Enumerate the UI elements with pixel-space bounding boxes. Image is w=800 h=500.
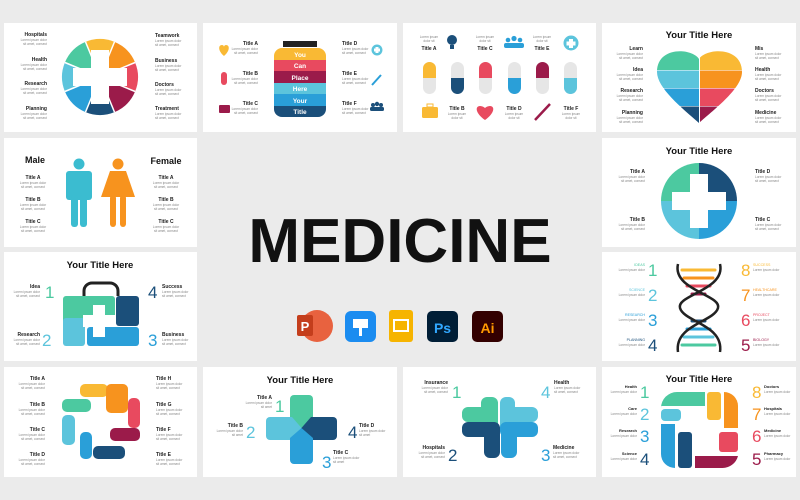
labels: Lorem ipsum dolor (359, 429, 386, 433)
panel: wheel diagram (4, 23, 197, 132)
labels: Insurance (424, 380, 448, 386)
labels: Lorem ipsum dolor (617, 116, 644, 120)
labels: Title D (30, 452, 45, 458)
labels: Doctors (755, 88, 774, 94)
labels: Lorem ipsum dolor (764, 457, 791, 461)
numbers: Lorem ipsum dolor (619, 343, 646, 347)
labels: sit amet, consect (424, 390, 448, 394)
heading: Your Title Here (666, 146, 732, 157)
labels: sit amet, consect (162, 342, 186, 346)
jar: You (294, 52, 306, 59)
labels: sit amet, consect (342, 111, 366, 115)
labels: Title B (30, 402, 45, 408)
bottom row: Title B (449, 106, 465, 112)
jar: Here (293, 86, 308, 93)
labels: sit amet, consect (234, 81, 258, 85)
labels right: sit amet, consect (155, 116, 179, 120)
jar: Title (293, 109, 307, 116)
labels: Title A (243, 41, 258, 47)
labels left: sit amet, consect (23, 67, 47, 71)
icon: powerpoint: P (301, 319, 310, 334)
labels: sit amet, consect (619, 56, 643, 60)
labels: Lorem ipsum dolor (14, 290, 41, 294)
labels: Lorem ipsum dolor (611, 457, 638, 461)
labels: Lorem ipsum dolor (764, 434, 791, 438)
labels: Lorem ipsum dolor (619, 175, 646, 179)
labels: sit amet, consect (156, 437, 180, 441)
petal chart (266, 395, 337, 464)
labels left: Research (24, 81, 47, 87)
numbers: 2 (648, 286, 657, 305)
labels: 6 (752, 427, 761, 446)
labels: sit amet, consect (621, 227, 645, 231)
labels: Title B (158, 197, 174, 203)
labels: Lorem ipsum dolor (764, 412, 791, 416)
numbers: SUCCESS (753, 263, 771, 267)
labels: Title G (156, 402, 172, 408)
numbers: 5 (741, 336, 750, 355)
labels: Title C (25, 219, 41, 225)
labels: sit amet, consect (21, 185, 45, 189)
labels: sit amet, consect (21, 412, 45, 416)
labels: Idea (30, 284, 40, 290)
labels: sit amet, consect (16, 294, 40, 298)
female figure (101, 158, 135, 227)
labels: sit amet, consect (154, 229, 178, 233)
labels (619, 169, 782, 231)
numbers: Lorem ipsum dolor (753, 293, 780, 297)
labels: sit amet, consect (554, 390, 578, 394)
labels (617, 46, 782, 124)
top row: Lorem ipsum (476, 35, 495, 39)
labels: sit amet, consect (21, 229, 45, 233)
labels: Lorem ipsum dolor (156, 382, 183, 386)
bottom row: dolor sit (565, 116, 577, 120)
numbers: Lorem ipsum dolor (619, 293, 646, 297)
labels left: Lorem ipsum dolor (21, 87, 48, 91)
labels left: Hospitals (24, 32, 47, 38)
labels: Success (162, 284, 183, 290)
icon: illustrator (472, 311, 503, 342)
labels: sit amet, consect (619, 120, 643, 124)
labels: Lorem ipsum dolor (162, 338, 189, 342)
labels: 5 (752, 450, 761, 469)
numbers: 8 (741, 261, 750, 280)
bottom row: Title D (506, 106, 522, 112)
labels (19, 376, 183, 466)
labels: sit amet, consect (755, 56, 779, 60)
labels: Lorem ipsum dolor (156, 458, 183, 462)
panel: woven cross (403, 367, 596, 477)
labels: Hospitals (764, 406, 783, 411)
labels: 1 (452, 383, 461, 402)
panel: male female (4, 138, 197, 247)
labels: Lorem ipsum dolor (764, 390, 791, 394)
ring chart (62, 384, 140, 459)
labels: Lorem ipsum dolor (14, 338, 41, 342)
labels: sit amet, consect (21, 386, 45, 390)
labels: Learn (629, 46, 643, 52)
labels: sit amet (333, 460, 344, 464)
heading: Your Title Here (267, 375, 333, 386)
bottom row: Lorem ipsum (448, 112, 467, 116)
labels: Care (628, 406, 638, 411)
labels: Business (162, 332, 184, 338)
labels: Lorem ipsum dolor (342, 77, 369, 81)
labels: Lorem ipsum dolor (553, 451, 580, 455)
labels: Lorem ipsum dolor (342, 107, 369, 111)
labels: Title E (342, 71, 358, 77)
panel: petal cross (203, 367, 397, 477)
labels: sit amet, consect (553, 455, 577, 459)
title: MEDICINE (248, 207, 552, 276)
icon: photoshop: Ps (434, 320, 451, 336)
jar: Your (293, 98, 308, 105)
panel: pills (403, 23, 596, 132)
labels: Lorem ipsum dolor (619, 223, 646, 227)
labels right: Lorem ipsum dolor (155, 64, 182, 68)
numbers (619, 261, 780, 355)
top row: dolor sit (423, 39, 435, 43)
numbers: 1 (648, 261, 657, 280)
labels: Lorem ipsum dolor (419, 451, 446, 455)
labels: Lorem ipsum dolor (611, 412, 638, 416)
labels: sit amet, consect (156, 412, 180, 416)
labels: 3 (541, 446, 550, 465)
labels: Lorem ipsum dolor (755, 116, 782, 120)
panel: jar (203, 23, 397, 132)
labels: sit amet, consect (755, 77, 779, 81)
labels: Title D (359, 423, 375, 429)
numbers: Lorem ipsum dolor (753, 268, 780, 272)
labels right: Treatment (155, 106, 179, 112)
labels: Lorem ipsum dolor (342, 47, 369, 51)
icon: slides (389, 310, 413, 342)
icon: illustrator: Ai (480, 320, 494, 336)
labels right (155, 33, 182, 120)
heading: Your Title Here (666, 374, 732, 385)
numbers: 4 (648, 336, 657, 355)
bottom row (422, 104, 581, 120)
jar: Can (294, 63, 306, 70)
labels: Lorem ipsum dolor (617, 52, 644, 56)
labels: Health (554, 380, 569, 386)
labels: Title F (156, 427, 171, 433)
bottom row: dolor sit (451, 116, 463, 120)
numbers: HEALTHCARE (753, 288, 777, 292)
labels: Medicine (755, 110, 777, 116)
male figure (66, 158, 92, 227)
labels: sit amet, consect (621, 179, 645, 183)
labels: Lorem ipsum dolor (755, 52, 782, 56)
labels right: sit amet, consect (155, 43, 179, 47)
labels: 7 (752, 405, 761, 424)
labels: Lorem ipsum dolor (422, 386, 449, 390)
labels left: Lorem ipsum dolor (21, 112, 48, 116)
briefcase chart (63, 283, 139, 346)
labels: Lorem ipsum dolor (611, 390, 638, 394)
bottom row: Lorem ipsum (562, 112, 581, 116)
labels left: Health (32, 57, 47, 63)
labels: Title A (30, 376, 45, 382)
labels: 8 (752, 383, 761, 402)
labels: Lorem ipsum dolor (611, 434, 638, 438)
labels (611, 383, 791, 469)
labels: Title D (342, 41, 358, 47)
labels: Title E (156, 452, 172, 458)
labels: Lorem ipsum dolor (217, 429, 244, 433)
icon: powerpoint (297, 310, 333, 342)
labels right: Lorem ipsum dolor (155, 112, 182, 116)
pills (423, 62, 577, 94)
labels: Lorem ipsum dolor (19, 458, 46, 462)
labels: sit amet, consect (421, 455, 445, 459)
labels: Lorem ipsum dolor (20, 203, 47, 207)
labels: sit amet, consect (21, 207, 45, 211)
labels: Lorem ipsum dolor (755, 175, 782, 179)
labels: 4 (148, 283, 157, 302)
labels: Lorem ipsum dolor (20, 181, 47, 185)
labels: sit amet, consect (342, 51, 366, 55)
icon: keynote (345, 311, 376, 342)
labels: Title A (158, 175, 174, 181)
icons: software logos (297, 310, 503, 342)
labels: 4 (640, 450, 649, 469)
labels: Medicine (764, 428, 782, 433)
labels: sit amet, consect (156, 462, 180, 466)
labels: Health (625, 384, 638, 389)
labels: Lorem ipsum dolor (755, 94, 782, 98)
labels: Lorem ipsum dolor (153, 225, 180, 229)
labels: Title A (257, 395, 272, 401)
top row: Title E (535, 46, 550, 52)
panel: segmented cross ring (4, 367, 197, 477)
labels: sit amet, consect (342, 81, 366, 85)
labels right: Teamwork (155, 33, 180, 39)
numbers: Lorem ipsum dolor (753, 318, 780, 322)
dna helix (677, 264, 721, 352)
labels: Mis (755, 46, 764, 52)
bottom row: Lorem ipsum (505, 112, 524, 116)
labels: 3 (322, 453, 331, 472)
labels right: Lorem ipsum dolor (155, 39, 182, 43)
labels left (21, 32, 48, 120)
labels: Title B (630, 217, 645, 223)
labels right: sit amet, consect (155, 68, 179, 72)
labels: Lorem ipsum dolor (19, 382, 46, 386)
labels: Hospitals (422, 445, 445, 451)
labels right: sit amet, consect (155, 92, 179, 96)
headings (25, 155, 182, 166)
labels: Lorem ipsum dolor (156, 408, 183, 412)
labels: Lorem ipsum dolor (554, 386, 581, 390)
labels: Lorem ipsum dolor (153, 181, 180, 185)
panel: rounded square ring (602, 367, 796, 477)
labels: Research (619, 428, 638, 433)
labels: Title C (333, 450, 349, 456)
labels: sit amet, consect (21, 462, 45, 466)
labels: sit amet, consect (755, 179, 779, 183)
circle cross chart (661, 163, 737, 239)
labels: Lorem ipsum dolor (755, 73, 782, 77)
labels: Title B (228, 423, 243, 429)
numbers: 3 (648, 311, 657, 330)
heading: Your Title Here (67, 260, 133, 271)
panel: heart (602, 23, 796, 132)
wheel segments (62, 39, 138, 115)
labels: Title A (630, 169, 645, 175)
labels: sit amet, consect (755, 227, 779, 231)
numbers: 6 (741, 311, 750, 330)
numbers: RESEARCH (625, 313, 645, 317)
top row: Title C (477, 46, 493, 52)
numbers: PROJECT (753, 313, 771, 317)
numbers: BIOLOGY (753, 338, 770, 342)
bottom row: Title F (564, 106, 578, 112)
bottom row: dolor sit (508, 116, 520, 120)
labels right: Lorem ipsum dolor (155, 88, 182, 92)
headings: Female (150, 156, 182, 166)
labels: sit amet (359, 433, 370, 437)
labels: Lorem ipsum dolor (232, 107, 259, 111)
labels: 2 (448, 446, 457, 465)
labels: Lorem ipsum dolor (153, 203, 180, 207)
labels: 1 (640, 383, 649, 402)
labels (419, 380, 581, 465)
top row: Lorem ipsum (533, 35, 552, 39)
labels left: Planning (26, 106, 47, 112)
labels: Lorem ipsum dolor (156, 433, 183, 437)
icon: photoshop (427, 311, 458, 342)
woven cross chart (462, 397, 538, 458)
labels: 4 (541, 383, 550, 402)
numbers: SCIENCE (629, 288, 646, 292)
labels: sit amet, consect (755, 98, 779, 102)
labels left: Lorem ipsum dolor (21, 63, 48, 67)
labels: Lorem ipsum dolor (333, 456, 360, 460)
labels: sit amet (261, 405, 272, 409)
panel: briefcase (4, 252, 197, 361)
labels: Title D (755, 169, 771, 175)
labels: Doctors (764, 384, 780, 389)
labels: Lorem ipsum dolor (617, 94, 644, 98)
labels: Title C (30, 427, 45, 433)
labels left: Lorem ipsum dolor (21, 38, 48, 42)
panel: dna (602, 252, 796, 361)
labels: 1 (275, 397, 284, 416)
labels: 3 (148, 331, 157, 350)
top row: Title A (421, 46, 437, 52)
labels (232, 41, 369, 115)
labels: sit amet, consect (154, 185, 178, 189)
heart chart (657, 51, 742, 123)
labels: sit amet, consect (21, 437, 45, 441)
labels: sit amet, consect (234, 111, 258, 115)
labels: Lorem ipsum dolor (232, 47, 259, 51)
labels (14, 283, 189, 350)
labels: Idea (633, 67, 643, 73)
labels: Lorem ipsum dolor (617, 73, 644, 77)
labels: sit amet, consect (154, 207, 178, 211)
labels: Title F (342, 101, 357, 107)
labels: 4 (348, 423, 357, 442)
labels: Title H (156, 376, 172, 382)
labels: Medicine (553, 445, 575, 451)
labels: 2 (640, 405, 649, 424)
labels: sit amet (232, 433, 243, 437)
labels: Title B (243, 71, 258, 77)
numbers: PLANNING (627, 338, 645, 342)
labels: Health (755, 67, 770, 73)
labels: Title B (25, 197, 41, 203)
labels: sit amet, consect (619, 98, 643, 102)
labels: Planning (622, 110, 643, 116)
labels: 2 (42, 331, 51, 350)
labels: 3 (640, 427, 649, 446)
labels: Science (622, 451, 638, 456)
labels: Pharmacy (764, 451, 784, 456)
numbers: IDEAS (634, 263, 646, 267)
labels right: Business (155, 58, 177, 64)
labels: 2 (246, 423, 255, 442)
labels left: sit amet, consect (23, 91, 47, 95)
jar: Place (292, 75, 309, 82)
top row (420, 35, 578, 52)
labels: Research (17, 332, 40, 338)
numbers: Lorem ipsum dolor (619, 268, 646, 272)
labels: sit amet, consect (162, 294, 186, 298)
top row: dolor sit (479, 39, 491, 43)
labels: 1 (45, 283, 54, 302)
numbers: Lorem ipsum dolor (753, 343, 780, 347)
labels: Title A (25, 175, 41, 181)
ring chart (661, 392, 738, 468)
numbers: Lorem ipsum dolor (619, 318, 646, 322)
labels: Lorem ipsum dolor (755, 223, 782, 227)
top row: Lorem ipsum (420, 35, 439, 39)
labels right: Doctors (155, 82, 174, 88)
labels: sit amet, consect (619, 77, 643, 81)
icons (219, 44, 384, 113)
jar (274, 41, 326, 117)
labels: Lorem ipsum dolor (246, 401, 273, 405)
labels: Title C (243, 101, 258, 107)
labels: Lorem ipsum dolor (19, 408, 46, 412)
labels: sit amet, consect (16, 342, 40, 346)
labels: sit amet, consect (755, 120, 779, 124)
labels left: sit amet, consect (23, 42, 47, 46)
labels (217, 395, 386, 472)
labels left: sit amet, consect (23, 116, 47, 120)
labels: sit amet, consect (156, 386, 180, 390)
labels: Title C (755, 217, 771, 223)
top row: dolor sit (536, 39, 548, 43)
numbers: 7 (741, 286, 750, 305)
labels: Lorem ipsum dolor (162, 290, 189, 294)
labels: Title C (158, 219, 174, 225)
labels: Lorem ipsum dolor (20, 225, 47, 229)
labels: Lorem ipsum dolor (232, 77, 259, 81)
panel: circle cross (602, 138, 796, 247)
labels: Research (620, 88, 643, 94)
labels: sit amet, consect (234, 51, 258, 55)
labels: Lorem ipsum dolor (19, 433, 46, 437)
headings: Male (25, 155, 45, 165)
heading: Your Title Here (666, 30, 732, 41)
labels (20, 175, 180, 233)
